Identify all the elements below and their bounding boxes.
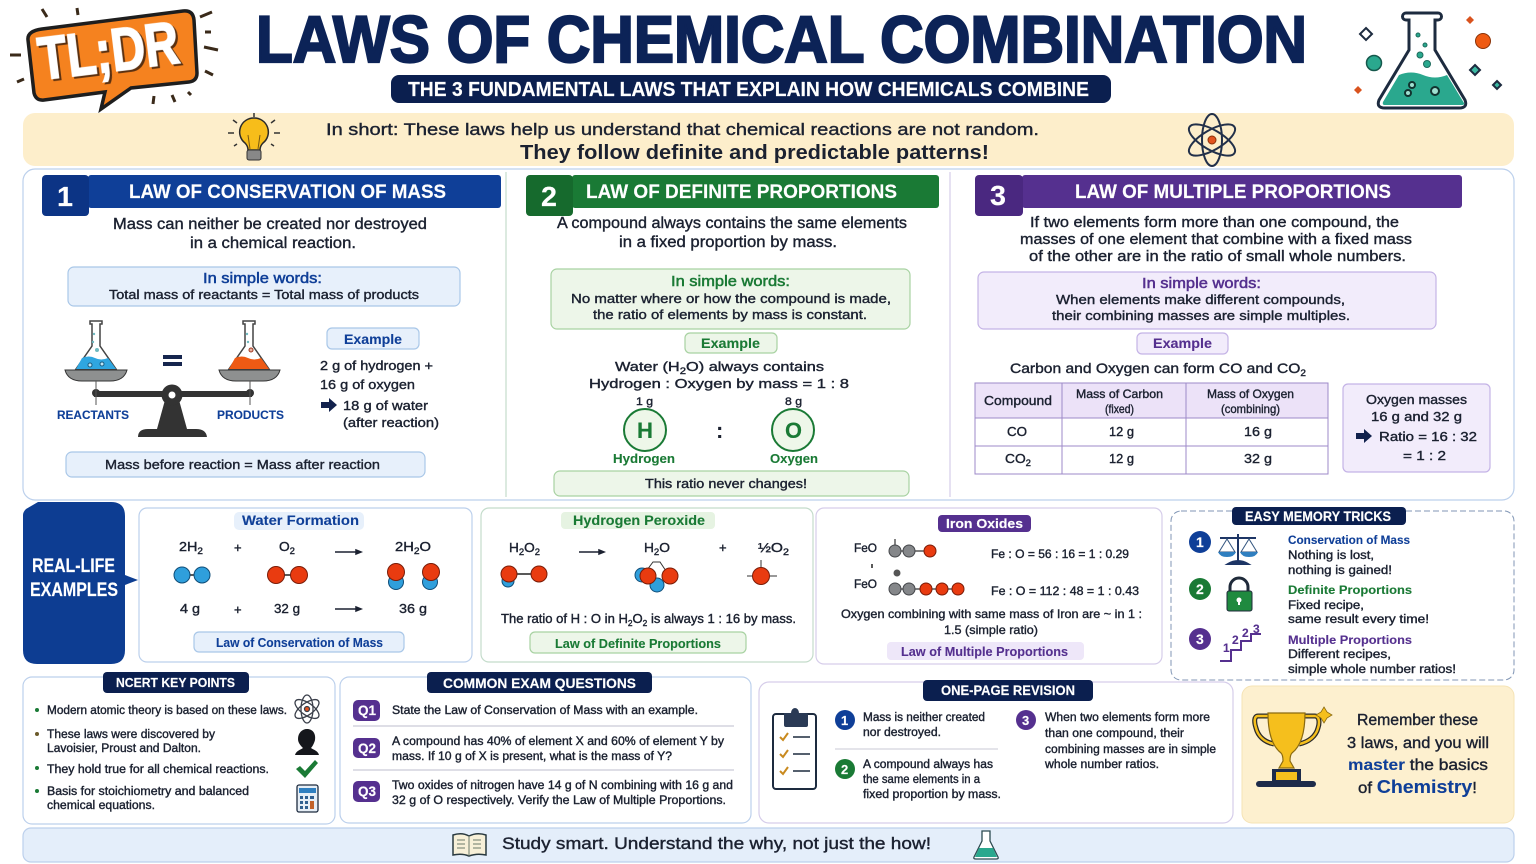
text: peroxide ratio: 2 (628, 619, 633, 628)
equation: water masses: + (234, 602, 242, 617)
text: law 2 statement (557, 215, 907, 251)
equation: water masses: 36 g (399, 601, 427, 616)
icon: balance scale with flasks (65, 321, 280, 437)
icon: check mark (296, 760, 318, 778)
panel: water formation (139, 508, 472, 662)
table: compound masses: CO (1005, 451, 1024, 466)
text: law 2 statement: in a fixed proportion by mass. (619, 234, 837, 251)
tag: multiple proportions (887, 642, 1084, 660)
revision point 3: combining masses are in simple (1045, 744, 1216, 756)
question 1 (353, 700, 698, 721)
diagram: hydrogen to oxygen ratio: H (637, 418, 653, 443)
text: remember these laws: master the basics (1348, 757, 1488, 774)
text: peroxide ratio: O (633, 612, 643, 626)
icon: atom (1184, 114, 1240, 166)
panel: hydrogen peroxide (481, 508, 813, 662)
equation: water masses: 32 g (274, 601, 300, 616)
revision point 3: than one compound, their (1045, 728, 1184, 740)
trick 2: definite proportions (1189, 578, 1429, 626)
equation: peroxide decomposition: 2 (654, 547, 659, 557)
molecules: iron oxides (854, 539, 964, 595)
trick 3: multiple proportions: 2 (1232, 633, 1239, 647)
text: remember these laws (1347, 712, 1489, 797)
trick 2: definite proportions: Definite Proportions (1288, 585, 1412, 597)
heading: water formation (234, 512, 364, 530)
heading: iron oxides: Iron Oxides (946, 516, 1023, 531)
label: real-life examples (23, 502, 138, 664)
heading: law 1: 1 (57, 181, 73, 212)
example: carbon and oxygen: Example (1153, 335, 1212, 351)
trick 3: multiple proportions: 2 (1242, 626, 1249, 640)
question 3: Q3 (358, 784, 377, 799)
label: products: PRODUCTS (217, 408, 284, 422)
callout: law 2 simple words (551, 269, 910, 329)
callout: mass before equals after: Mass before reaction = Mass after reaction (105, 457, 380, 472)
question 2: A compound has 40% of element X and 60% of element Y by (392, 736, 724, 748)
table: compound masses: 2 (1026, 458, 1031, 468)
molecules: hydrogen, oxygen and water (174, 564, 440, 590)
equation: peroxide decomposition: ½O (758, 540, 779, 555)
text: iron ratios: 1.5 (simple ratio) (944, 623, 1038, 637)
trick 1: conservation of mass: nothing is gained! (1288, 565, 1392, 577)
list: key points: Lavoisier, Proust and Dalton. (47, 743, 201, 755)
title: LAWS OF CHEMICAL COMBINATION (256, 2, 1307, 76)
callout: oxygen mass ratio: = 1 : 2 (1403, 448, 1446, 463)
text: in short: In short: These laws help us understand that chemical reactions are not random. (326, 120, 1039, 139)
trick 3: multiple proportions: 3 (1196, 631, 1204, 647)
equation: water masses: O (279, 539, 289, 554)
molecules: iron oxides: FeO (854, 543, 877, 555)
text: iron ratios: Fe : O = 56 : 16 = 1 : 0.29 (991, 549, 1129, 561)
tag: conservation of mass: Law of Conservation of Mass (216, 636, 383, 650)
trick 1: conservation of mass: Conservation of Mass (1288, 535, 1410, 547)
text: iron ratios (841, 549, 1142, 637)
icon: flask with teal liquid (1354, 13, 1501, 108)
revision point 2: 2 (841, 762, 848, 777)
callout: oxygen mass ratio: Ratio = 16 : 32 (1379, 429, 1477, 444)
equation: peroxide decomposition: H (644, 540, 653, 555)
icon: atom small (292, 695, 322, 723)
trick 1: conservation of mass: Nothing is lost, (1288, 550, 1374, 562)
table: compound masses: 32 g (1244, 451, 1272, 466)
callout: ratio never changes (554, 471, 909, 496)
text: peroxide ratio: 2 (643, 619, 648, 628)
panel: easy memory tricks (1171, 507, 1514, 680)
callout: law 1 simple words: In simple words: (203, 271, 322, 287)
heading: law 1 (42, 175, 501, 216)
revision point 3 (1016, 710, 1216, 771)
equation: peroxide decomposition: 2 (535, 547, 540, 557)
icon: light bulb (228, 113, 280, 160)
question 3: 32 g of O respectively. Verify the Law of Multiple Proportions. (392, 795, 726, 807)
text: remember these laws: 3 laws, and you will (1347, 735, 1489, 752)
text: law 2 statement: A compound always contains the same elements (557, 215, 907, 232)
callout: law 1 simple words: Total mass of reactants = Total mass of products (109, 287, 420, 302)
list: key points: chemical equations. (47, 800, 155, 812)
example: water ratio: O) always contains (686, 359, 825, 374)
trick 3: multiple proportions: 1 (1223, 641, 1230, 655)
callout: mass before equals after (66, 452, 425, 477)
revision point 3: 3 (1022, 713, 1029, 728)
trick 3: multiple proportions: 3 (1253, 622, 1260, 636)
text: law 3 statement: of the other are in the ratio of small whole numbers. (1029, 249, 1406, 265)
panel: law 2 definite proportions (526, 175, 939, 496)
example: water mass: 16 g of oxygen (320, 377, 415, 392)
revision point 1: Mass is neither created (863, 712, 985, 724)
trick 2: definite proportions: 2 (1196, 581, 1204, 597)
panel: in short banner (23, 113, 1514, 166)
list: key points: Modern atomic theory is based on these laws. (47, 705, 287, 717)
text: peroxide ratio: is always 1 : 16 by mass. (647, 612, 796, 626)
tag: conservation of mass (194, 632, 404, 652)
heading: law 1: LAW OF CONSERVATION OF MASS (129, 182, 446, 203)
revision point 1: nor destroyed. (863, 727, 941, 739)
tag: definite proportions: Law of Definite Proportions (555, 637, 721, 651)
trick 1: conservation of mass (1189, 531, 1410, 577)
diagram: hydrogen to oxygen ratio: O (785, 418, 802, 443)
table: compound masses: (fixed) (1105, 402, 1134, 416)
table: compound masses (975, 383, 1328, 474)
panel: NCERT key points (23, 672, 335, 824)
list: key points: These laws were discovered by (47, 729, 215, 741)
example: water ratio: 2 (680, 366, 686, 376)
panel: remember these laws (1242, 686, 1514, 823)
text: study smart: Study smart. Understand the why, not just the how! (502, 835, 931, 853)
equation: peroxide decomposition: H (509, 540, 518, 555)
table: compound masses: Mass of Carbon (1076, 387, 1163, 401)
equation: water masses (179, 539, 431, 617)
heading: law 3: LAW OF MULTIPLE PROPORTIONS (1075, 182, 1391, 203)
equation: peroxide decomposition: 2 (783, 547, 789, 557)
subtitle banner: THE 3 FUNDAMENTAL LAWS THAT EXPLAIN HOW CHEMICALS COMBINE (408, 79, 1089, 101)
callout: ratio never changes: This ratio never changes! (645, 476, 807, 491)
callout: law 3 simple words: When elements make different compounds, (1056, 292, 1345, 307)
icon: TL;DR speech bubble: TL;DR (34, 9, 183, 93)
trick 1: conservation of mass: 1 (1196, 534, 1204, 550)
icon: small flask (974, 831, 998, 859)
example: water mass: 18 g of water (343, 398, 429, 413)
callout: law 3 simple words: their combining masses are simple multiples. (1052, 308, 1350, 323)
icon: scientist silhouette (295, 729, 319, 755)
icon: clipboard checklist (773, 708, 816, 789)
trick 2: definite proportions: Fixed recipe, (1288, 600, 1364, 612)
table: compound masses: Compound (984, 393, 1052, 408)
equation: water masses: 2 (414, 546, 420, 556)
diagram: hydrogen to oxygen ratio: Oxygen (770, 451, 818, 466)
revision point 2: fixed proportion by mass. (863, 789, 1001, 801)
text: law 3 statement: masses of one element that combine with a fixed mass (1020, 232, 1412, 248)
tag: definite proportions (530, 632, 746, 653)
icon: open book (453, 834, 486, 856)
question 3 (353, 780, 733, 807)
question 3: Two oxides of nitrogen have 14 g of N combining with 16 g and (392, 780, 733, 792)
equation: peroxide decomposition: 2 (519, 547, 524, 557)
diagram: hydrogen to oxygen ratio: : (716, 418, 723, 443)
example: carbon and oxygen: 2 (1300, 368, 1306, 378)
equation: water masses: 2H (395, 539, 412, 554)
text: iron ratios: Oxygen combining with same mass of Iron are ~ in 1 : (841, 607, 1142, 621)
heading: NCERT (103, 672, 249, 693)
text: iron ratios: Fe : O = 112 : 48 = 1 : 0.43 (991, 586, 1139, 598)
table: compound masses: (combining) (1221, 402, 1280, 416)
panel: three laws frame (23, 169, 1514, 500)
text: law 1 statement: Mass can neither be created nor destroyed (113, 216, 427, 233)
example: water mass (320, 328, 439, 430)
heading: revision: ONE-PAGE REVISION (941, 683, 1075, 698)
example: carbon and oxygen: Carbon and Oxygen can form CO and CO (1010, 360, 1271, 376)
table: compound masses: 12 g (1109, 424, 1134, 439)
label: real-life examples: REAL-LIFE (32, 556, 115, 577)
diagram: hydrogen to oxygen ratio: 8 g (785, 396, 802, 408)
example: carbon and oxygen (1010, 333, 1306, 378)
tag: multiple proportions: Law of Multiple Proportions (901, 645, 1068, 659)
equation: water masses: 2 (197, 546, 203, 556)
revision point 1: 1 (841, 713, 848, 728)
molecules: peroxide products (501, 560, 777, 592)
heading: NCERT: NCERT KEY POINTS (116, 675, 235, 690)
table: compound masses: Mass of Oxygen (1207, 387, 1294, 401)
text: remember these laws: Remember these (1357, 712, 1478, 729)
question 2: mass. If 10 g of X is present, what is the mass of Y? (392, 751, 672, 763)
label: reactants: REACTANTS (57, 408, 129, 422)
heading: exam questions: COMMON EXAM QUESTIONS (443, 675, 636, 691)
revision point 2: A compound always has (863, 759, 993, 771)
revision point 2: the same elements in a (863, 774, 981, 786)
trick 3: multiple proportions: Multiple Proportions (1288, 635, 1412, 647)
example: water ratio: Water (H (615, 359, 667, 374)
callout: law 2 simple words: In simple words: (671, 274, 790, 290)
heading: memory tricks: EASY MEMORY TRICKS (1245, 509, 1391, 524)
callout: law 2 simple words: No matter where or how the compound is made, (571, 291, 891, 306)
example: water ratio: Hydrogen : Oxygen by mass = 1 : 8 (589, 376, 849, 391)
panel: law 1 conservation of mass (42, 175, 501, 477)
equation: water masses: 4 g (180, 601, 200, 616)
heading: law 2 (526, 175, 939, 216)
panel: footer strip (23, 828, 1514, 862)
trick 2: definite proportions: same result every time! (1288, 614, 1429, 626)
heading: law 3 (975, 175, 1462, 216)
table: compound masses: 12 g (1109, 451, 1134, 466)
example: water mass: 2 g of hydrogen + (320, 358, 433, 373)
icon: trophy (1255, 707, 1332, 787)
icon: calculator (297, 785, 318, 812)
text: law 1 statement: in a chemical reaction. (190, 235, 356, 252)
heading: law 2: 2 (541, 181, 557, 212)
callout: oxygen mass ratio: 16 g and 32 g (1371, 409, 1462, 424)
text: law 1 statement (113, 216, 427, 252)
panel: iron oxides (816, 508, 1162, 664)
table: compound masses: CO (1007, 424, 1027, 439)
diagram: hydrogen to oxygen ratio (613, 396, 818, 466)
list: key points (35, 705, 287, 812)
heading: law 2: LAW OF DEFINITE PROPORTIONS (586, 182, 897, 203)
equation: water masses: O (420, 539, 431, 554)
diagram: hydrogen to oxygen ratio: 1 g (636, 396, 653, 408)
callout: law 1 simple words (68, 267, 460, 306)
callout: law 2 simple words: the ratio of elements by mass is constant. (593, 307, 867, 322)
heading: iron oxides (938, 515, 1031, 532)
panel: law 3 multiple proportions (975, 175, 1490, 474)
example: water ratio: Example (701, 335, 760, 351)
heading: water formation: Water Formation (242, 513, 359, 528)
equation: peroxide decomposition: + (719, 540, 727, 555)
callout: oxygen mass ratio (1343, 384, 1490, 472)
example: water mass: (after reaction) (343, 415, 439, 430)
question 1: Q1 (358, 703, 377, 718)
question 1: State the Law of Conservation of Mass with an example. (392, 705, 698, 717)
equation: peroxide decomposition: O (524, 540, 535, 555)
heading: revision (923, 680, 1093, 701)
table: compound masses: 16 g (1244, 424, 1272, 439)
example: water ratio (589, 333, 849, 391)
text: law 3 statement (1020, 215, 1412, 265)
text: peroxide ratio: The ratio of H : O in H (501, 612, 623, 626)
text: remember these laws: of Chemistry ! (1358, 777, 1477, 797)
callout: law 3 simple words (978, 272, 1436, 329)
revision point 1 (835, 710, 985, 739)
list: key points: They hold true for all chemical reactions. (47, 764, 269, 776)
equation: water masses: 2H (179, 539, 196, 554)
example: water mass: Example (344, 331, 402, 347)
trick 3: multiple proportions (1189, 622, 1456, 676)
heading: hydrogen peroxide: Hydrogen Peroxide (573, 513, 706, 528)
heading: law 3: 3 (990, 180, 1006, 211)
heading: exam questions (427, 672, 652, 693)
panel: one-page revision (759, 680, 1233, 823)
list: key points: Basis for stoichiometry and balanced (47, 786, 249, 798)
callout: oxygen mass ratio: Oxygen masses (1366, 392, 1468, 407)
equation: water masses: + (234, 540, 242, 555)
revision point 2 (835, 759, 1001, 801)
callout: law 3 simple words: In simple words: (1142, 276, 1261, 292)
trick 3: multiple proportions: Different recipes, (1288, 649, 1391, 661)
equation: peroxide decomposition: O (659, 540, 670, 555)
question 2 (353, 736, 724, 763)
text: predictable patterns: They follow definite and predictable patterns! (520, 142, 989, 164)
revision point 3: whole number ratios. (1044, 759, 1159, 771)
equation: peroxide decomposition (509, 540, 789, 557)
diagram: hydrogen to oxygen ratio: Hydrogen (613, 451, 675, 466)
label: real-life examples: EXAMPLES (30, 580, 118, 601)
panel: common exam questions (340, 672, 751, 823)
molecules: iron oxides: FeO (854, 579, 877, 591)
text: law 3 statement: If two elements form more than one compound, the (1030, 215, 1399, 231)
equation: water masses: 2 (290, 546, 295, 556)
revision point 3: When two elements form more (1045, 712, 1210, 724)
question 2: Q2 (358, 741, 376, 756)
trick 3: multiple proportions: simple whole number ratios! (1288, 664, 1456, 676)
